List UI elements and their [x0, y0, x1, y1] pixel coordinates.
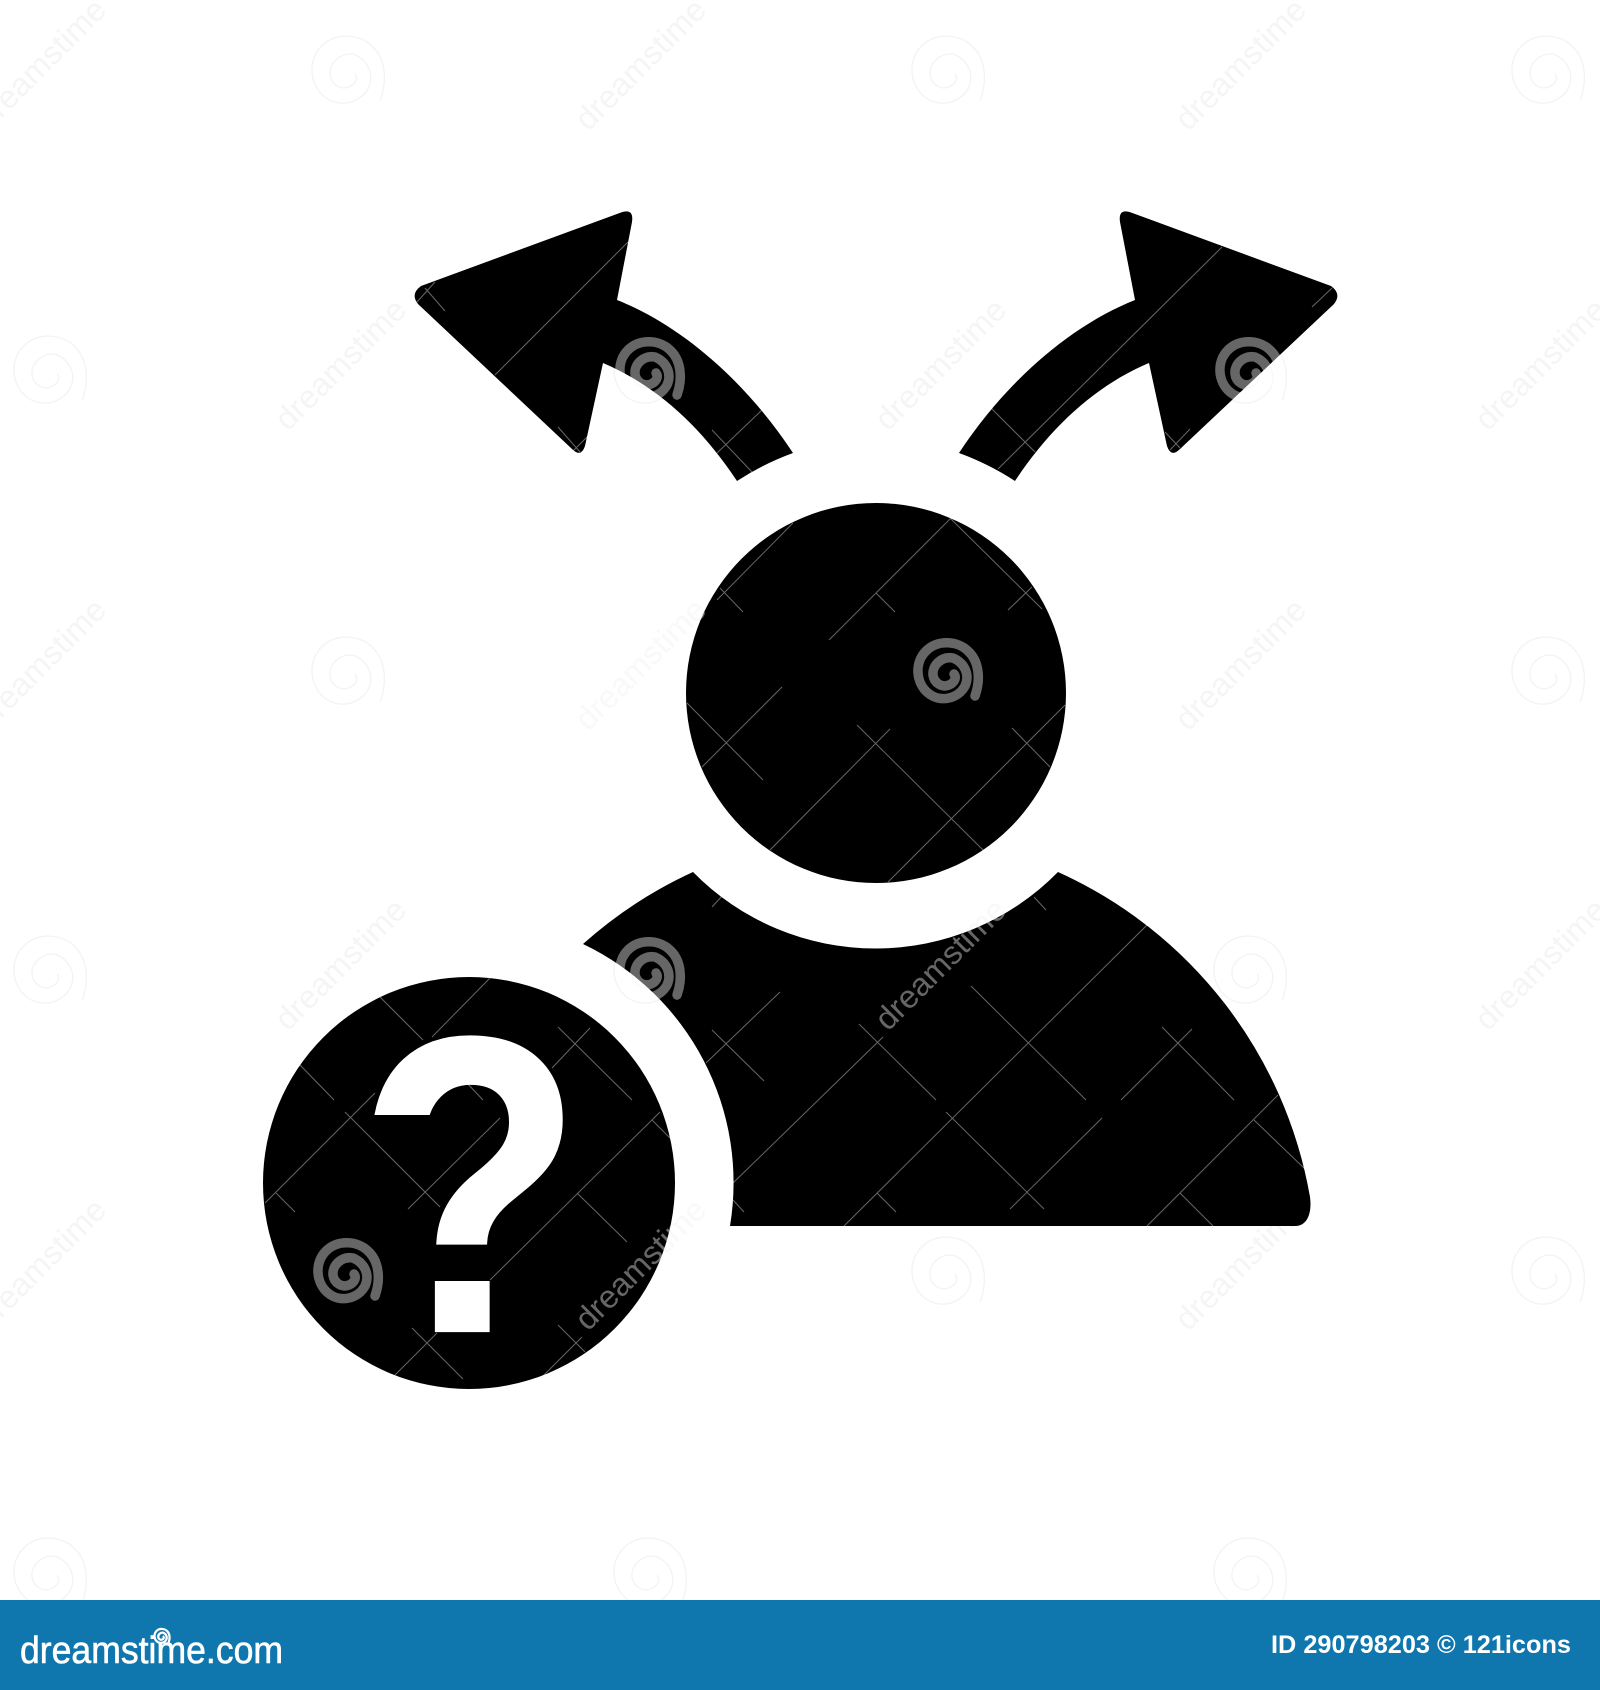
watermark overlay on black shapes: dreamstime: [567, 1191, 713, 1337]
faint watermark on white: dreamstime: [867, 891, 1013, 1037]
person body: [583, 872, 1310, 1226]
faint watermark on white: dreamstime: [267, 891, 413, 1037]
faint watermark on white: dreamstime: [867, 291, 1013, 437]
faint watermark on white: dreamstime: [1167, 1191, 1313, 1337]
footer logo: dreamstime.com: [20, 1630, 283, 1672]
arrow: curved up-left: [415, 211, 793, 481]
faint watermark on white: dreamstime: [567, 1191, 713, 1337]
question badge: [263, 950, 675, 1420]
footer bar: [0, 1600, 1600, 1690]
watermark overlay on black shapes: [265, 242, 1332, 1379]
person head: [686, 503, 1066, 883]
arrow: curved up-right: [959, 211, 1337, 481]
question badge: ?: [357, 950, 583, 1420]
watermark overlay on black shapes: dreamstime: [867, 891, 1013, 1037]
icon: person with two arrows and question mark: [263, 211, 1337, 1420]
faint watermark on white: dreamstime: [267, 291, 413, 437]
footer credit: ID 290798203 © 121icons: [1271, 1631, 1571, 1659]
watermark overlay on black shapes: dreamstime: [567, 591, 713, 737]
faint watermark on white: dreamstime: [1167, 591, 1313, 737]
faint watermark on white: dreamstime: [567, 591, 713, 737]
